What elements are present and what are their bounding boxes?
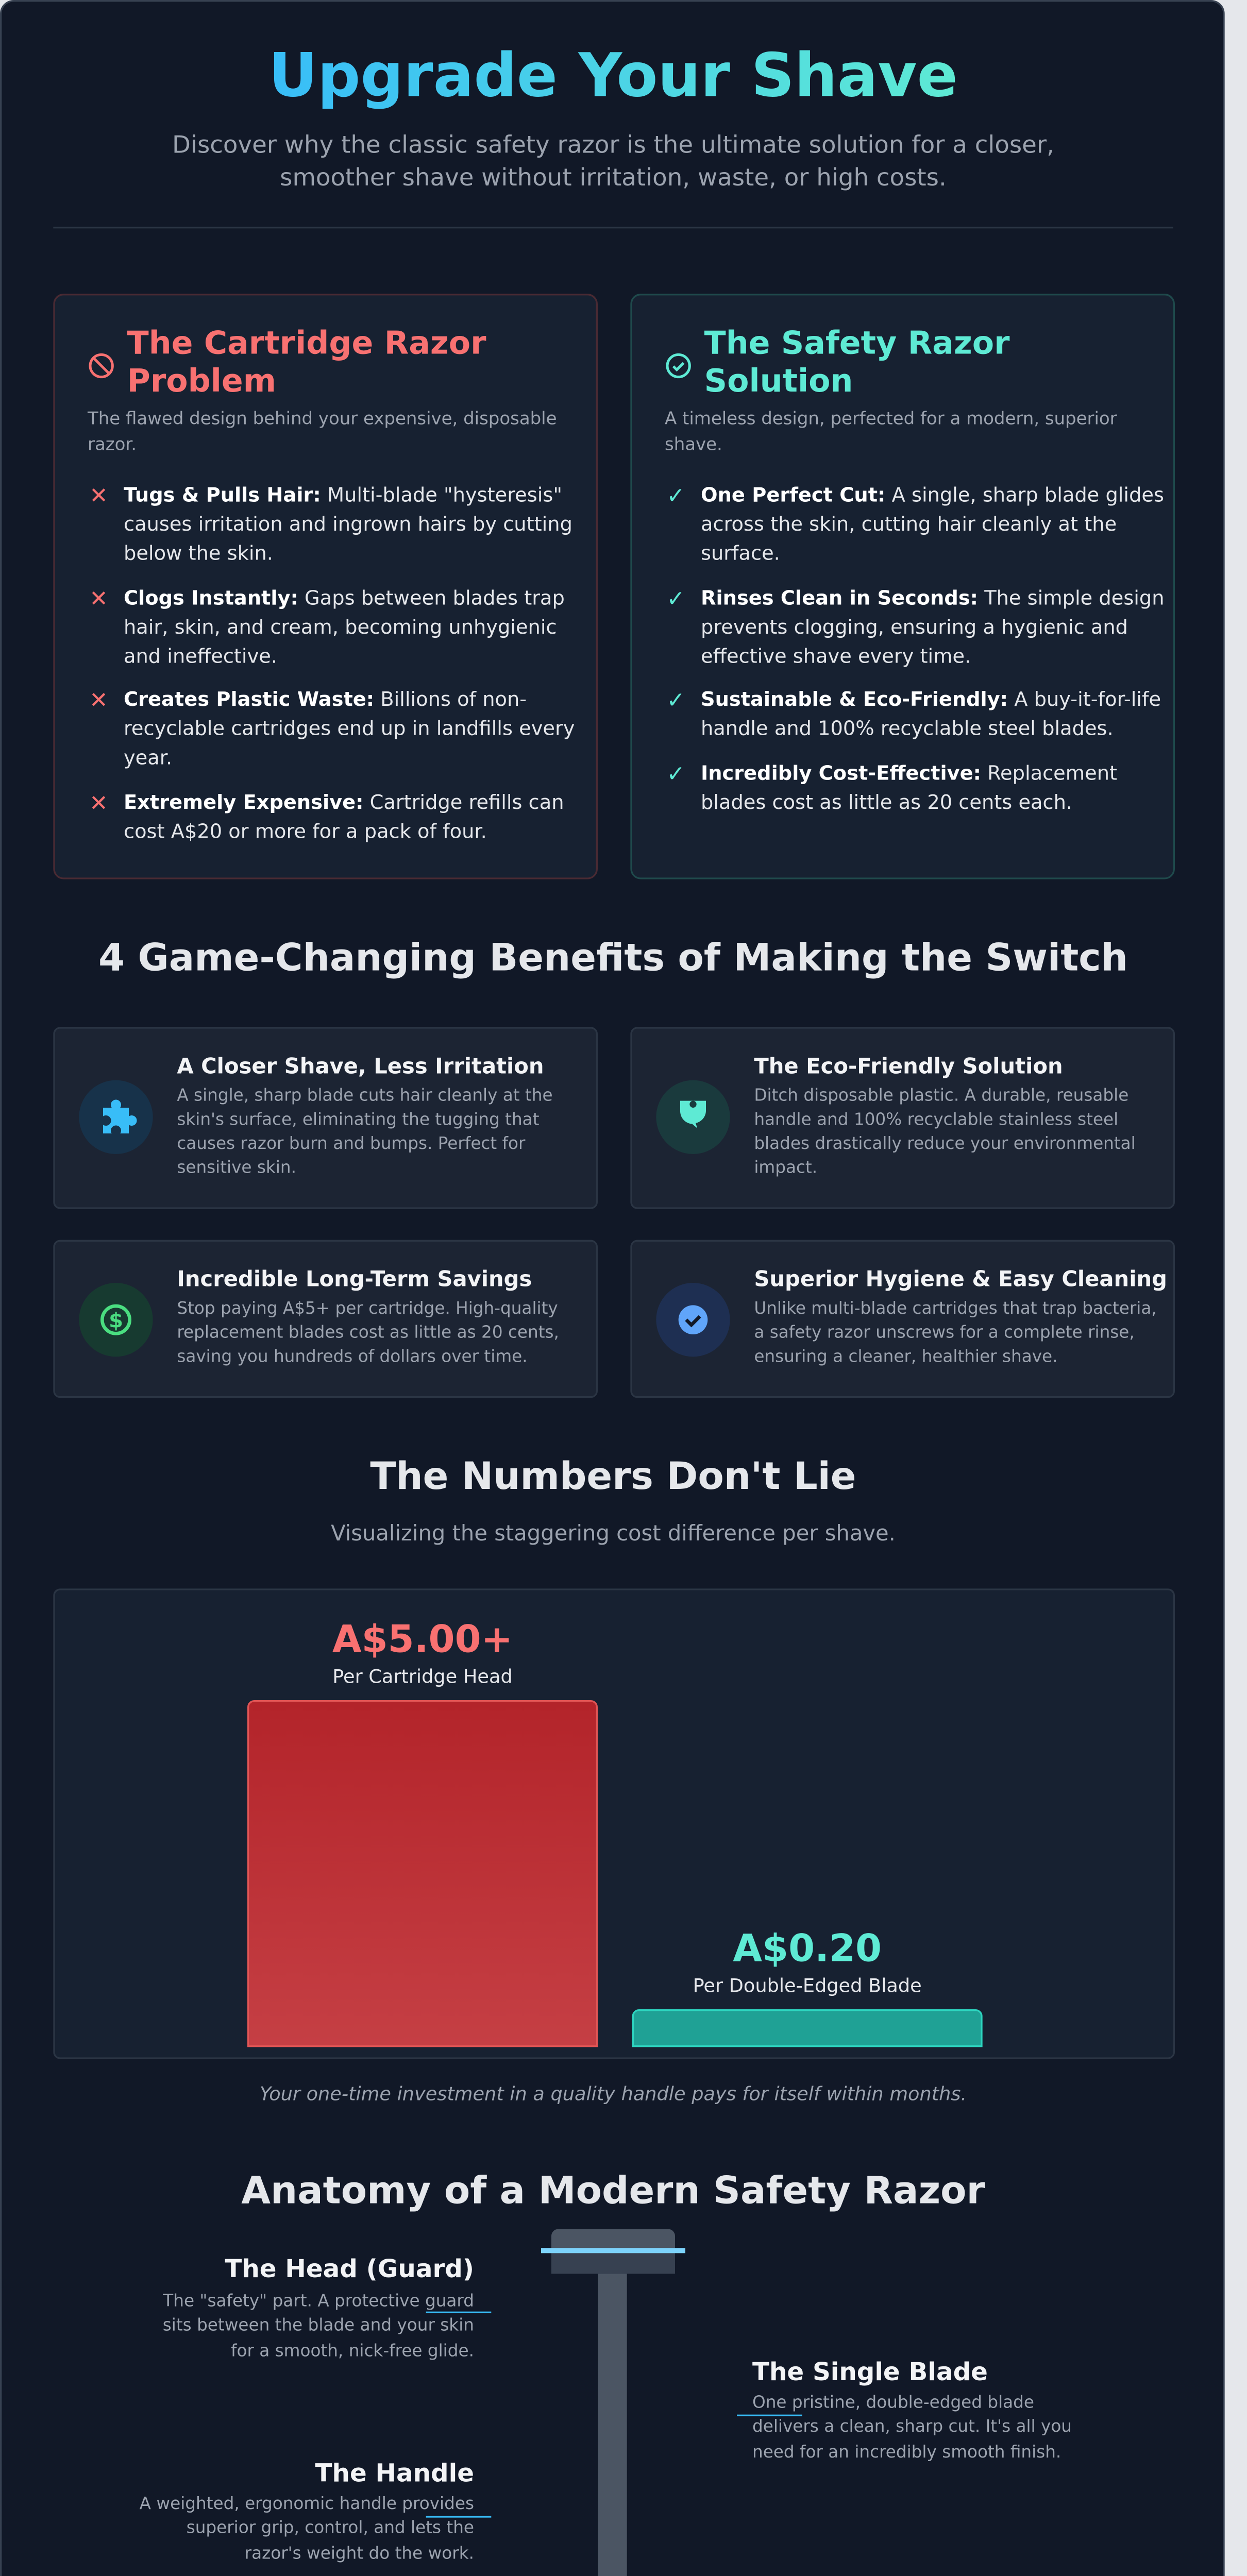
heading: The Cartridge Razor (127, 326, 486, 362)
heading (704, 326, 1010, 400)
list: problems (89, 483, 575, 843)
list: problems: ✕ (89, 689, 108, 715)
list: solutions: ✓ (666, 689, 685, 715)
list: problems: ✕ (89, 792, 108, 818)
benefit card: savings (53, 1240, 598, 1398)
heading: anatomy: Anatomy of a Modern Safety Razor (241, 2171, 985, 2214)
subheading: Visualizing the staggering cost difference per shave. (331, 1520, 896, 1546)
label: blade: need for an incredibly smooth finish. (752, 2443, 1061, 2462)
razor head (551, 2229, 675, 2274)
benefit card: closer shave (53, 1027, 598, 1209)
list: solutions: ✓ (666, 762, 685, 788)
heading: Solution (704, 364, 853, 400)
list: problems: Extremely Expensive: Cartridge refills can cost A$20 or more for a pack of four. (124, 790, 564, 843)
list: solutions: ✓ (666, 587, 685, 613)
list: problems: ✕ (89, 587, 108, 613)
list: solutions: One Perfect Cut: A single, sharp blade glides across the skin, cutting hair cleanly at the surface. (701, 483, 1164, 565)
bar label: safety blade: A$0.20 (733, 1928, 882, 1972)
benefit card: eco: Ditch disposable plastic. A durable, reusable handle and 100% recyclable stainless steel blades drastically reduce your environmental impact. (754, 1087, 1136, 1178)
bar label: safety blade: Per Double-Edged Blade (693, 1975, 922, 1997)
label: head (163, 2257, 474, 2361)
label: head: sits between the blade and your skin (163, 2317, 474, 2336)
subtitle: Discover why the classic safety razor is the ultimate solution for a closer, (172, 132, 1054, 160)
icon: puzzle (79, 1080, 153, 1154)
benefit card: closer shave: A Closer Shave, Less Irritation (177, 1053, 544, 1078)
icon: check (656, 1283, 730, 1357)
list: solutions: ✓ (666, 484, 685, 510)
label: head: for a smooth, nick-free glide. (231, 2342, 474, 2361)
text: The flawed design behind your expensive, disposable razor. (88, 411, 557, 454)
list: problems: Creates Plastic Waste: Billions of non-recyclable cartridges end up in landfills every year. (124, 687, 575, 769)
heading: benefits: 4 Game-Changing Benefits of Making the Switch (98, 938, 1128, 980)
list: problems: Clogs Instantly: Gaps between blades trap hair, skin, and cream, becoming unhygienic and ineffective. (124, 586, 565, 668)
label: handle: razor's weight do the work. (245, 2545, 474, 2563)
label: handle: superior grip, control, and lets the (187, 2520, 474, 2539)
list: solutions (666, 483, 1165, 814)
label: handle (139, 2461, 474, 2563)
bar chart (53, 1588, 1175, 2059)
heading: numbers: The Numbers Don't Lie (370, 1456, 856, 1499)
panel: cartridge problem (53, 294, 598, 879)
label: blade (752, 2360, 1072, 2462)
bar label: cartridge: A$5.00+ (332, 1619, 513, 1663)
bar label: cartridge (332, 1619, 513, 1688)
label: blade: delivers a clean, sharp cut. It's all you (752, 2418, 1072, 2437)
icon: check circle (666, 353, 691, 378)
icon: prohibited (89, 353, 114, 378)
list: problems: ✕ (89, 484, 108, 510)
heading (127, 326, 486, 400)
label: blade: One pristine, double-edged blade (752, 2394, 1034, 2413)
label: handle: A weighted, ergonomic handle provides (140, 2495, 474, 2514)
list: problems: Tugs & Pulls Hair: Multi-blade "hysteresis" causes irritation and ingrown hairs by cutting below the skin. (124, 483, 572, 565)
bar label: safety blade (693, 1928, 922, 1997)
benefit card: hygiene (630, 1240, 1175, 1398)
caption: Your one-time investment in a quality handle pays for itself within months. (260, 2083, 967, 2106)
benefit card: eco (630, 1027, 1175, 1209)
subtitle: smoother shave without irritation, waste, or high costs. (280, 164, 947, 192)
label: handle: The Handle (315, 2461, 474, 2488)
icon: leaf (656, 1080, 730, 1154)
benefit card: savings: Stop paying A$5+ per cartridge. High-quality replacement blades cost as little as 20 cents, saving you hundreds of dollars over time. (177, 1300, 559, 1367)
bar label: cartridge: Per Cartridge Head (332, 1666, 513, 1688)
razor diagram (541, 2229, 685, 2576)
benefit card: closer shave: A single, sharp blade cuts hair cleanly at the skin's surface, eliminating the tugging that causes razor burn and bumps. Perfect for sensitive skin. (177, 1087, 553, 1178)
icon: dollar (79, 1283, 153, 1357)
subtitle (172, 132, 1054, 192)
list: solutions: Sustainable & Eco-Friendly: A buy-it-for-life handle and 100% recyclable steel blades. (701, 687, 1161, 740)
label: blade: The Single Blade (752, 2360, 988, 2387)
text: A timeless design, perfected for a modern, superior shave. (665, 411, 1117, 454)
blade (541, 2248, 685, 2253)
benefit card: hygiene: Unlike multi-blade cartridges that trap bacteria, a safety razor unscrews for a complete rinse, ensuring a cleaner, healthier shave. (754, 1300, 1157, 1367)
heading: The Safety Razor (704, 326, 1010, 362)
icon: dollar: $ (109, 1309, 123, 1333)
bar: cartridge (247, 1700, 598, 2047)
benefit card: hygiene: Superior Hygiene & Easy Cleaning (754, 1266, 1167, 1292)
list: solutions: Incredibly Cost-Effective: Replacement blades cost as little as 20 cents each. (701, 761, 1117, 814)
label: head: The "safety" part. A protective guard (163, 2293, 474, 2312)
benefit card: savings: Incredible Long-Term Savings (177, 1266, 532, 1292)
panel: safety razor solution (630, 294, 1175, 879)
bar: safety blade (632, 2009, 983, 2047)
title: Upgrade Your Shave (268, 43, 958, 112)
handle (598, 2274, 627, 2576)
benefit card: eco: The Eco-Friendly Solution (754, 1053, 1063, 1078)
label: head: The Head (Guard) (225, 2257, 474, 2284)
list: solutions: Rinses Clean in Seconds: The simple design prevents clogging, ensuring a hygienic and effective shave every time. (701, 586, 1165, 668)
heading: Problem (127, 364, 276, 400)
